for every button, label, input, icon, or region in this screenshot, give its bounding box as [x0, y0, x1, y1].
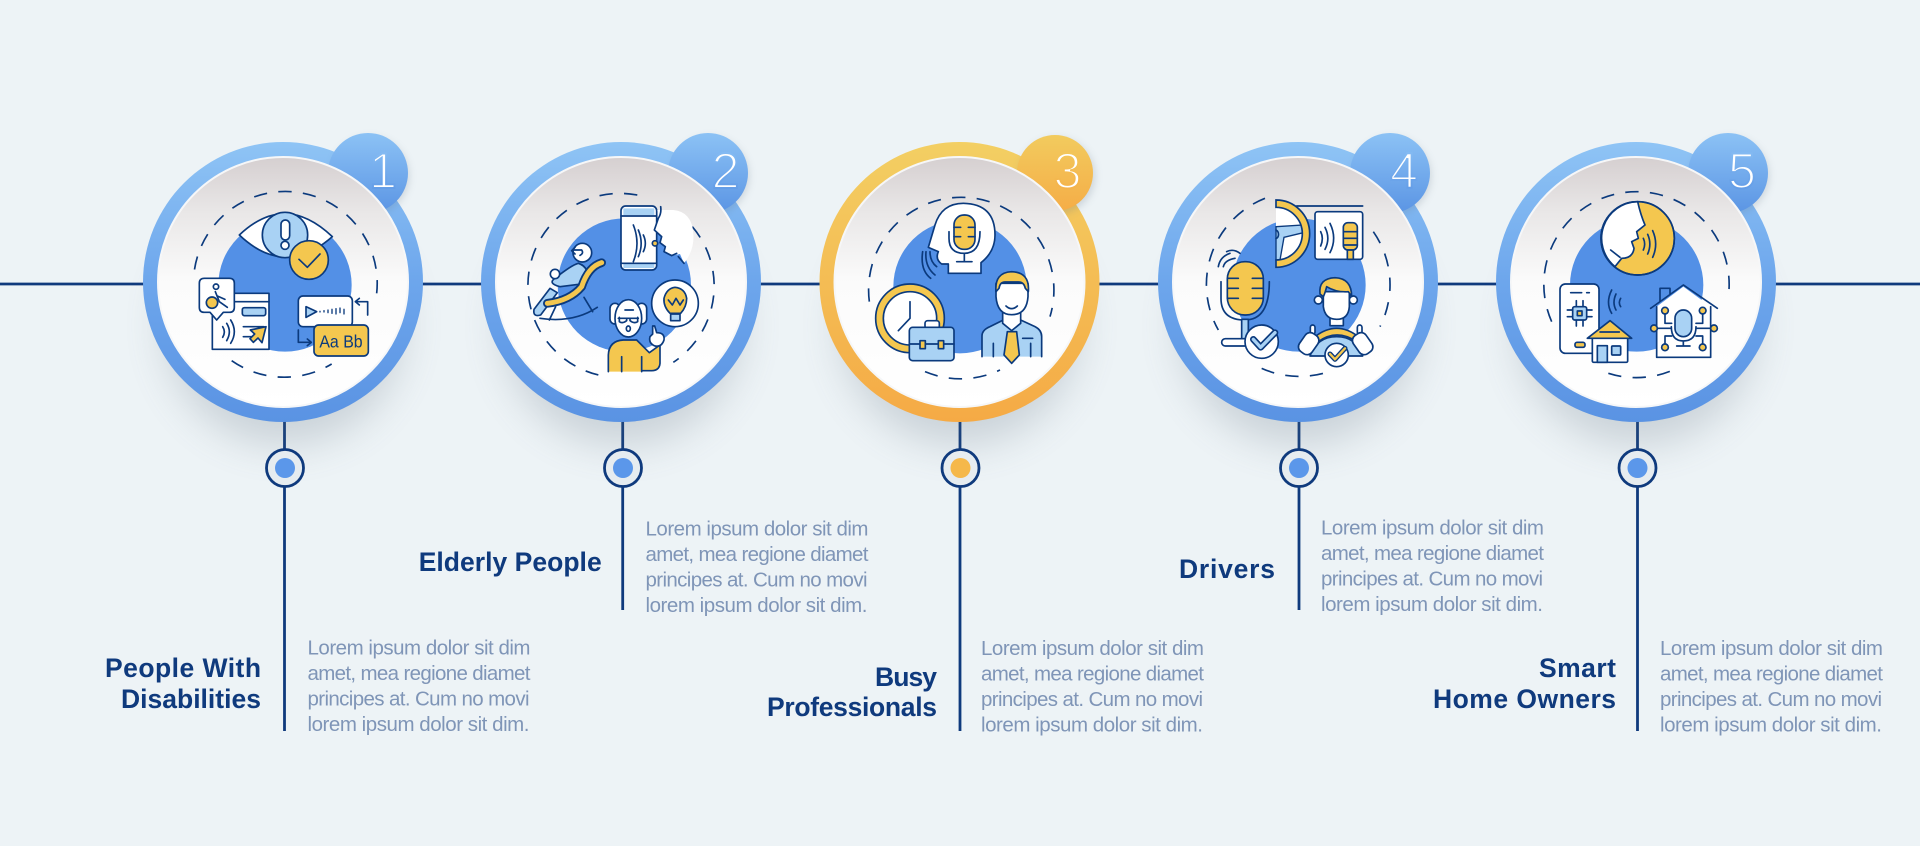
inner disc 4 [1173, 157, 1423, 407]
badge 4 [1350, 133, 1431, 215]
body text 3: amet, mea regione diamet [981, 662, 1204, 686]
ring 3 [820, 142, 1100, 422]
heading 3: Professionals [767, 692, 937, 722]
step 3: busy professionals [767, 135, 1204, 736]
ring 4 [1158, 142, 1438, 422]
body text 4 [1321, 516, 1544, 616]
number 4: 4 [1390, 143, 1418, 199]
body text 1: amet, mea regione diamet [308, 662, 531, 685]
number 3: 3 [1054, 143, 1081, 199]
inner disc 3 [834, 157, 1084, 407]
body text 2: amet, mea regione diamet [646, 543, 869, 566]
body text 4: Lorem ipsum dolor sit dim [1321, 516, 1544, 540]
body text 5: lorem ipsum dolor sit dim. [1660, 714, 1882, 736]
heading 5: Home Owners [1433, 684, 1616, 714]
node 3 [942, 450, 979, 486]
icon: busy professional [869, 197, 1054, 379]
drop shadow 3 [840, 205, 1080, 445]
body text 3: lorem ipsum dolor sit dim. [981, 714, 1203, 736]
badge 2 [668, 133, 749, 215]
inner disc 1 [158, 157, 408, 407]
body text 2: principes at. Cum no movi [646, 568, 868, 592]
step 5: smart home owners [1433, 133, 1883, 736]
body text 4: amet, mea regione diamet [1321, 542, 1544, 565]
body text 2: lorem ipsum dolor sit dim. [646, 594, 868, 617]
icon: smart home [1544, 192, 1729, 378]
heading 4: Drivers [1179, 554, 1275, 584]
vertical connector 5 [1636, 420, 1639, 731]
heading 1: People With [105, 653, 261, 683]
body text 3: Lorem ipsum dolor sit dim [981, 637, 1204, 660]
heading 3 [767, 662, 937, 722]
number 1: 1 [369, 143, 397, 199]
node 2 [604, 450, 642, 486]
horizontal timeline connector [0, 283, 1920, 285]
step 2: elderly people [419, 133, 869, 617]
ring 2 [481, 142, 761, 422]
heading 5: Smart [1539, 653, 1616, 683]
vertical connector 1 [283, 420, 286, 731]
drop shadow 5 [1517, 205, 1757, 445]
body text 2 [646, 518, 869, 617]
heading 5 [1433, 653, 1616, 714]
drop shadow 4 [1179, 205, 1419, 445]
inner disc 5 [1511, 157, 1761, 407]
inner disc 2 [496, 157, 746, 407]
body text 3: principes at. Cum no movi [981, 688, 1203, 711]
heading 3: Busy [875, 662, 937, 692]
heading 1: Disabilities [121, 684, 261, 714]
body text 4: lorem ipsum dolor sit dim. [1321, 593, 1543, 616]
number 2: 2 [712, 143, 739, 199]
heading 2: Elderly People [419, 547, 602, 577]
icon: drivers [1206, 198, 1390, 376]
icon: accessibility [194, 191, 377, 377]
body text 1: principes at. Cum no movi [308, 688, 530, 710]
heading 1 [105, 653, 261, 714]
vertical connector 4 [1298, 420, 1300, 610]
body text 5: principes at. Cum no movi [1660, 688, 1882, 711]
ring 5 [1496, 142, 1776, 422]
body text 3 [981, 637, 1204, 736]
badge 3 [1017, 135, 1095, 214]
vertical connector 3 [959, 420, 961, 731]
body text 2: Lorem ipsum dolor sit dim [646, 518, 868, 540]
body text 1: lorem ipsum dolor sit dim. [308, 713, 530, 736]
node 1 [266, 450, 304, 486]
icon: elderly voice assistant [528, 193, 714, 375]
step 4: drivers [1158, 133, 1544, 616]
step 1: people with disabilities [105, 133, 531, 736]
badge 5 [1688, 133, 1769, 215]
drop shadow 1 [164, 205, 404, 445]
drop shadow 2 [502, 205, 742, 445]
body text 5: amet, mea regione diamet [1660, 662, 1883, 686]
icon: accessibility: Aa Bb [319, 331, 363, 351]
body text 5 [1660, 637, 1883, 736]
body text 4: principes at. Cum no movi [1321, 568, 1543, 590]
vertical connector 2 [621, 420, 624, 610]
node 5 [1619, 450, 1656, 486]
number 5: 5 [1728, 143, 1756, 199]
body text 1: Lorem ipsum dolor sit dim [308, 636, 530, 660]
body text 5: Lorem ipsum dolor sit dim [1660, 637, 1883, 660]
body text 1 [308, 636, 531, 736]
ring 1 [143, 142, 423, 422]
badge 1 [328, 133, 409, 215]
node 4 [1280, 450, 1318, 486]
